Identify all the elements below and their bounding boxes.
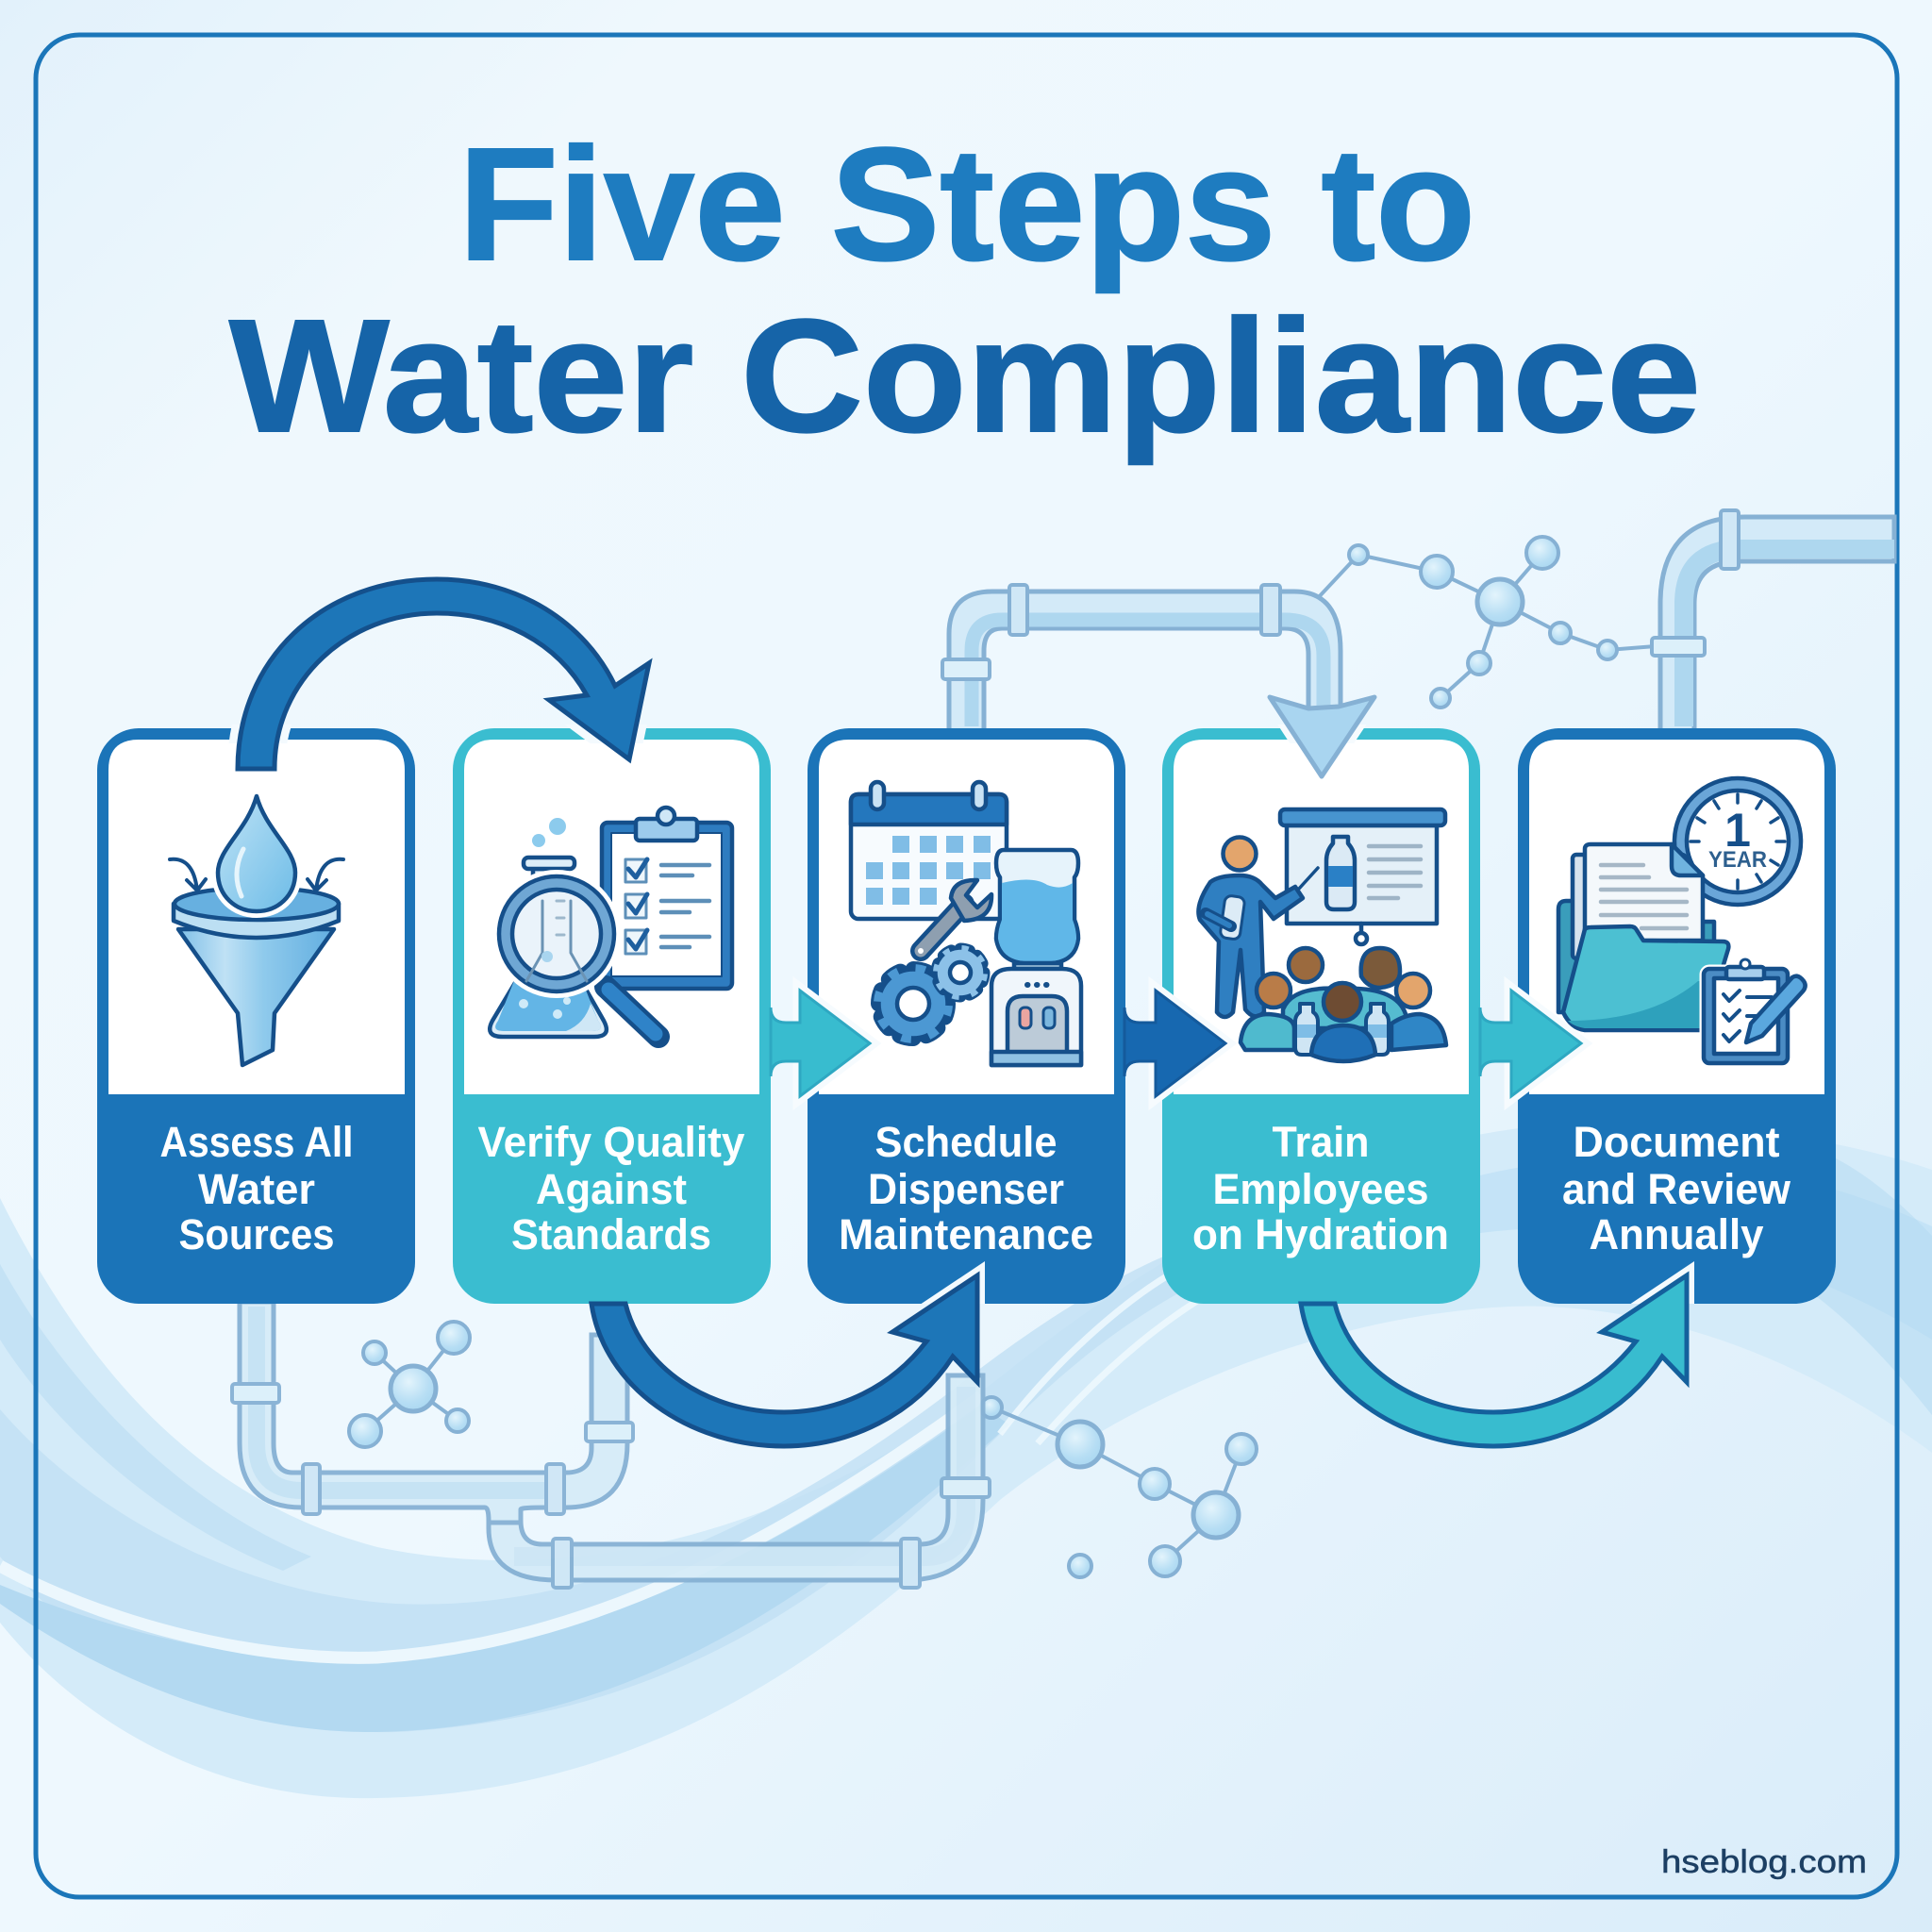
card 2: Verify Quality Against Standards (453, 728, 771, 1304)
label: step 5 (1562, 1118, 1791, 1258)
label: step 3: Maintenance (839, 1210, 1093, 1258)
icon: document folder, clock and clipboard: YEAR (1708, 847, 1767, 873)
arrow: card 4 to card 5 bottom curve (1301, 1275, 1687, 1446)
pipe: top from card 3 to card 4 (942, 585, 1341, 736)
card 4: Train Employees on Hydration (1162, 728, 1480, 1304)
arrow: card 2 to card 3 bottom curve (591, 1275, 977, 1446)
label: step 4: on Hydration (1192, 1210, 1449, 1258)
label: step 2 (477, 1118, 745, 1258)
card 5: Document and Review Annually (1518, 728, 1836, 1304)
arrow: card 2 to card 3 straight (771, 991, 870, 1096)
label: step 4: Employees (1213, 1165, 1428, 1213)
label: step 5: Document (1574, 1118, 1780, 1166)
label: step 4: Train (1272, 1118, 1370, 1166)
molecule: lower right (981, 1397, 1257, 1577)
label: step 5: and Review (1562, 1165, 1791, 1213)
icon: trainer and audience (1198, 809, 1446, 1061)
title: Water Compliance (229, 287, 1701, 466)
molecule: lower left (349, 1322, 470, 1447)
title (229, 115, 1701, 466)
card 1: Assess All Water Sources (97, 728, 415, 1304)
arrow: card 4 to card 5 straight (1480, 991, 1581, 1096)
label: step 1 (160, 1118, 353, 1258)
label: step 2: Verify Quality (477, 1118, 745, 1166)
arrow: card 3 to card 4 straight (1124, 991, 1225, 1096)
card 3: Schedule Dispenser Maintenance (808, 728, 1125, 1304)
icon: flask, magnifier and checklist (490, 808, 732, 1037)
icon: funnel and water drop (170, 796, 343, 1065)
label: step 5: Annually (1589, 1210, 1764, 1258)
icon: calendar, wrench, gears and water cooler (851, 782, 1081, 1065)
icon: document folder, clock and clipboard (1558, 778, 1806, 1063)
icon: document folder, clock and clipboard: 1 (1724, 804, 1751, 857)
label: step 2: Standards (511, 1210, 711, 1258)
background water waves (0, 1123, 1932, 1798)
watermark: hseblog.com (1661, 1844, 1867, 1880)
pipe: top right to frame edge (1652, 510, 1894, 736)
label: step 2: Against (536, 1165, 687, 1213)
arrow: card 1 to card 2 top curve (238, 579, 649, 769)
label: step 3: Dispenser (868, 1165, 1064, 1213)
title: Five Steps to (458, 115, 1475, 294)
pipes: lower network (232, 1302, 990, 1588)
label: step 1: Assess All (160, 1118, 353, 1166)
label: step 3: Schedule (875, 1118, 1057, 1166)
label: step 3 (839, 1118, 1093, 1258)
arrow: pipe arrow head into card 4 (1270, 697, 1374, 776)
molecule: upper right (1316, 537, 1656, 708)
label: step 4 (1192, 1118, 1449, 1258)
label: step 1: Sources (179, 1210, 334, 1258)
label: step 1: Water (198, 1165, 315, 1213)
